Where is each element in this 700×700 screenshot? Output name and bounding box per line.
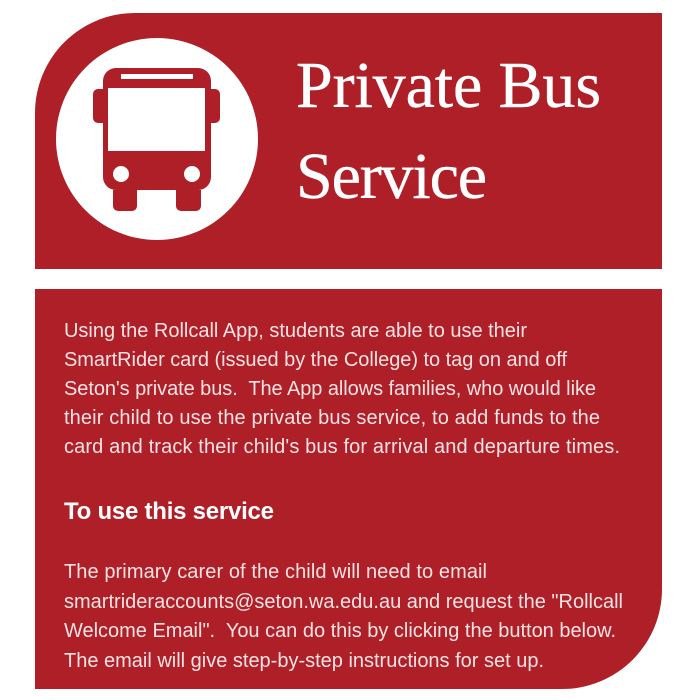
text block: introduction: card and track their child's bus for arrival and departure times. (64, 436, 620, 458)
body background (35, 289, 662, 689)
text block: introduction (64, 320, 620, 458)
icon: bus in white circle (56, 38, 258, 240)
title: Private Bus (296, 49, 601, 122)
title: Service (296, 140, 487, 213)
text block: introduction: Seton's private bus. The App allows families, who would like (64, 378, 596, 400)
text block: introduction: Using the Rollcall App, students are able to use their (64, 320, 527, 342)
heading: to use this service: To use this service (64, 498, 274, 525)
text block: instructions: smartrideraccounts@seton.wa.edu.au and request the "Rollcall (64, 591, 623, 613)
title (296, 49, 601, 213)
header background (35, 13, 662, 269)
panel: body (35, 289, 662, 689)
text block: introduction: their child to use the private bus service, to add funds to the (64, 407, 600, 429)
text block: introduction: SmartRider card (issued by the College) to tag on and off (64, 349, 567, 371)
text block: instructions: Welcome Email". You can do this by clicking the button below. (64, 620, 616, 642)
text block: instructions: The primary carer of the child will need to email (64, 561, 487, 583)
text block: instructions (64, 561, 623, 672)
text block: instructions: The email will give step-by-step instructions for set up. (64, 650, 544, 672)
panel: header (35, 13, 662, 269)
